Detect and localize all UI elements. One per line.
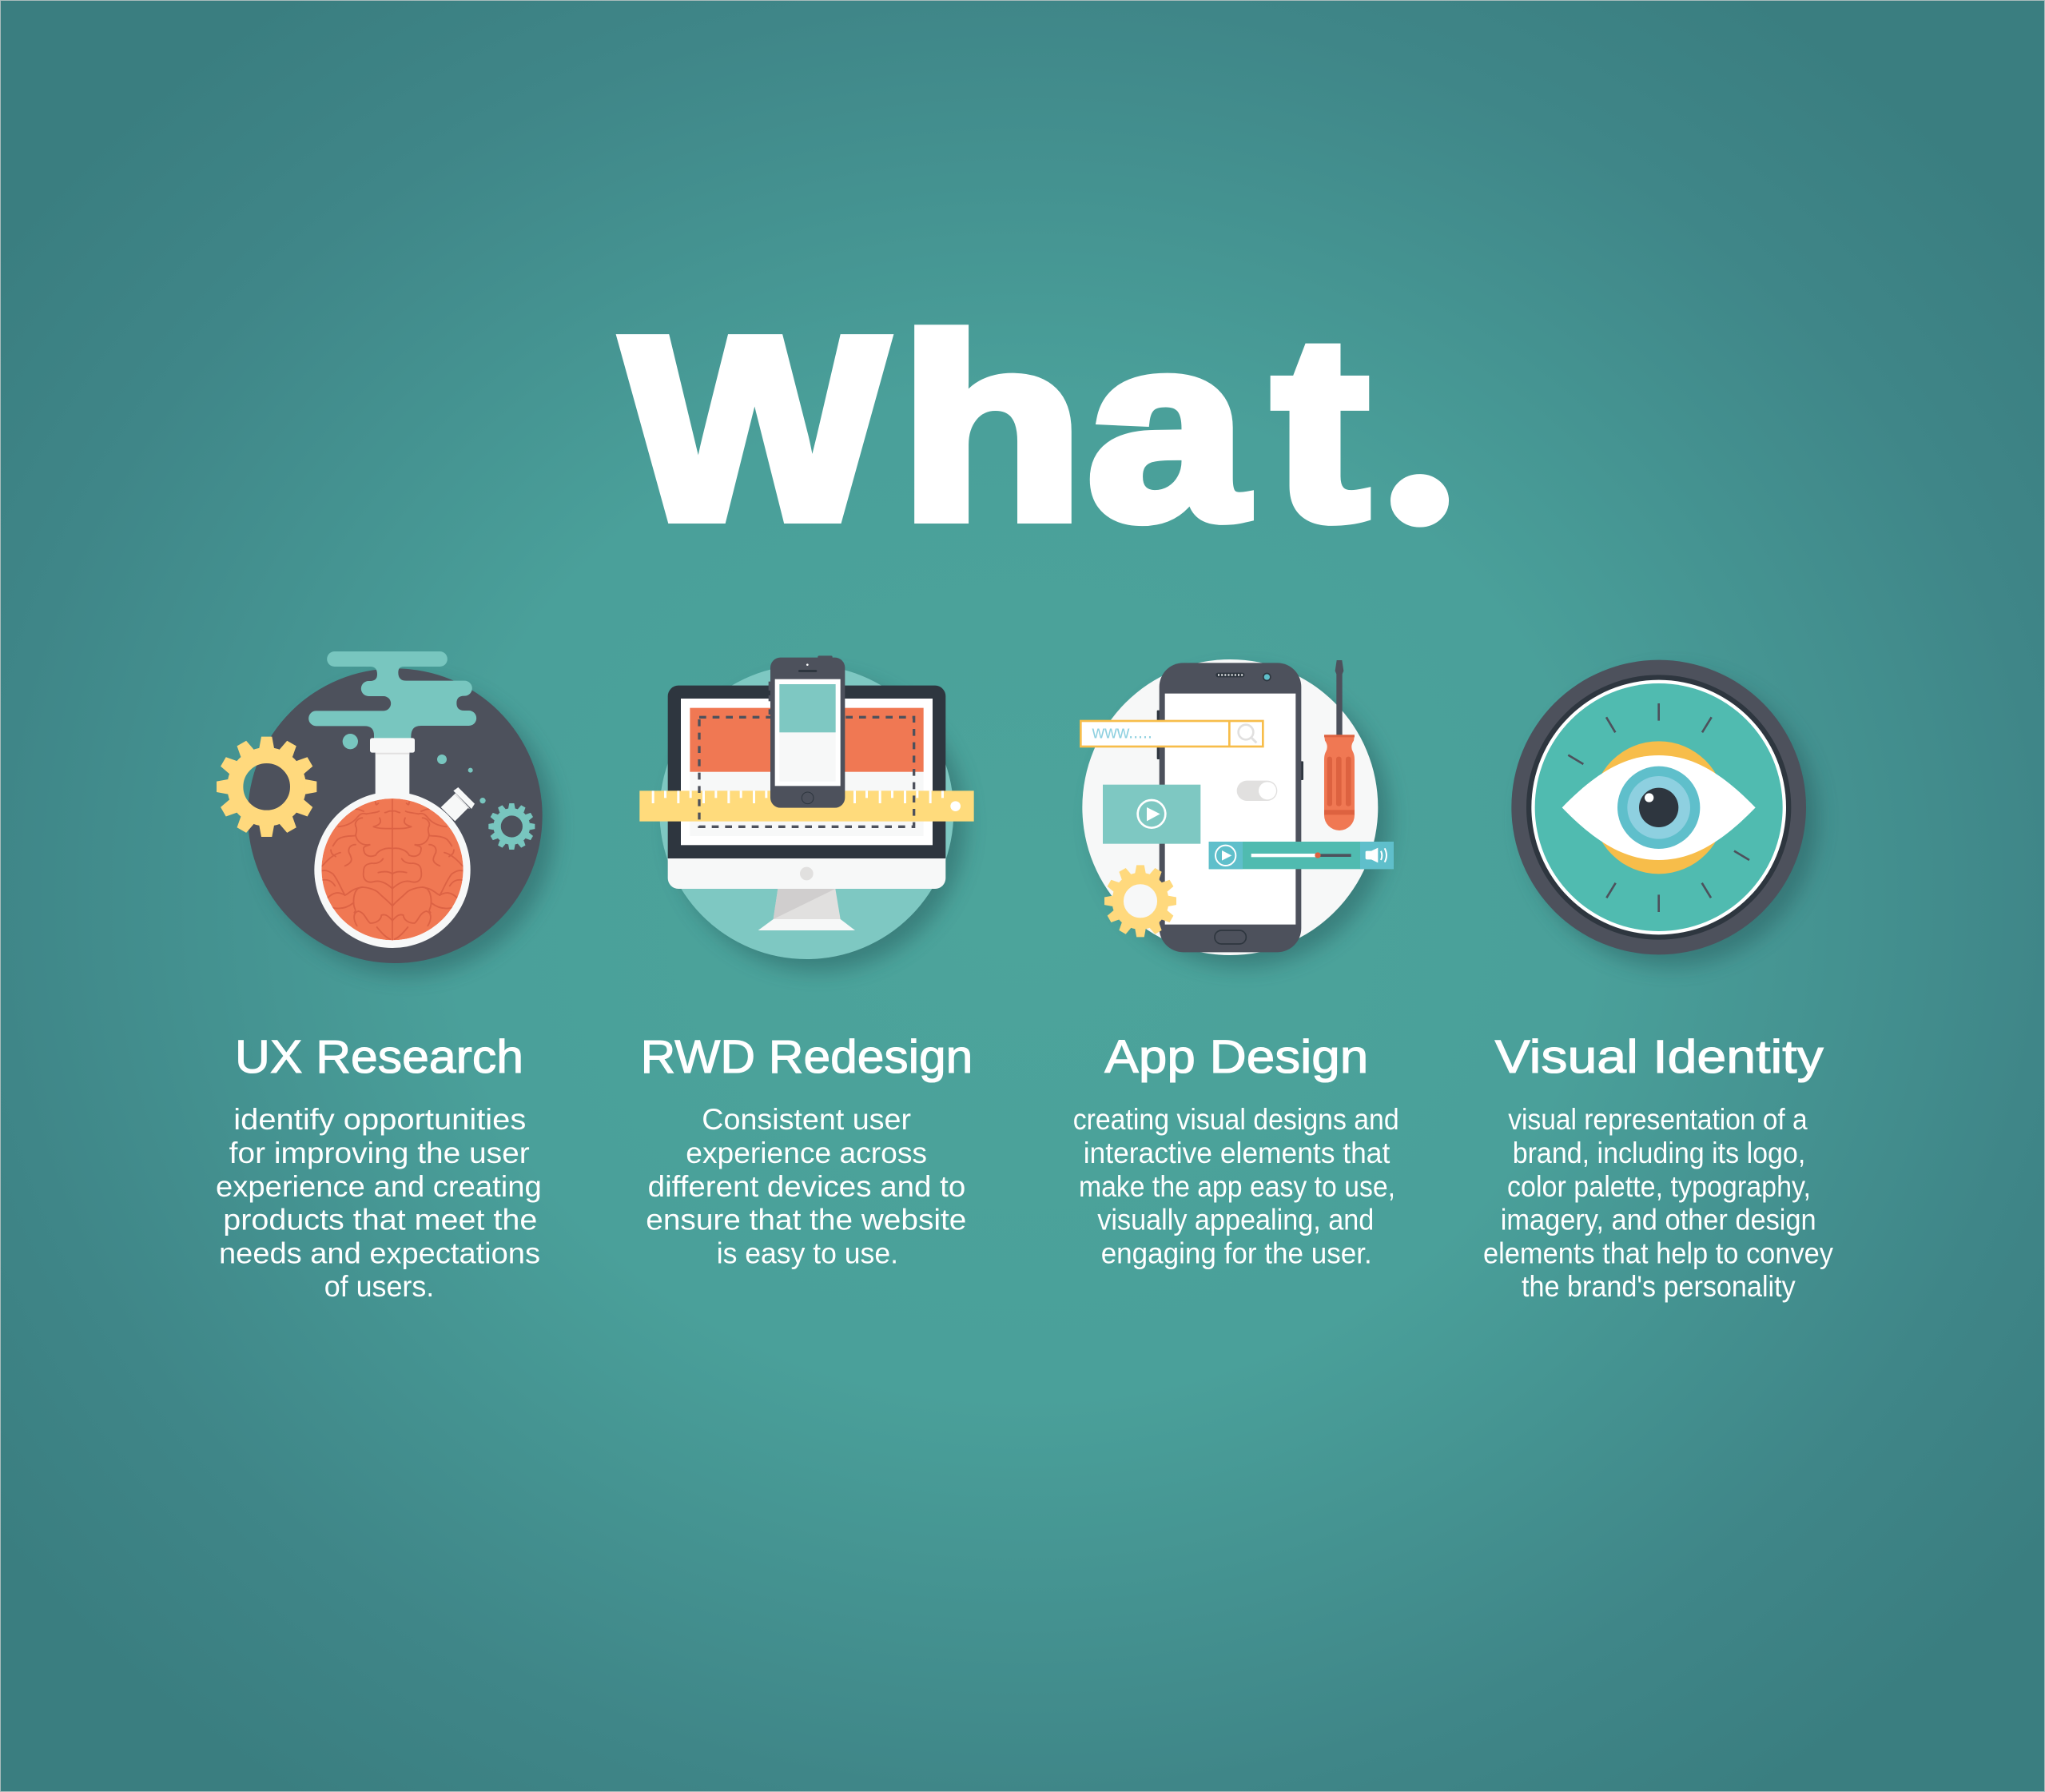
description: identify opportunities [233, 1103, 526, 1136]
column: UX Research [216, 1031, 542, 1303]
description: visually appealing, and [1097, 1204, 1374, 1236]
bubbles [343, 734, 486, 803]
description: interactive elements that [1084, 1137, 1391, 1169]
heading: UX Research [235, 1031, 523, 1083]
heading: Visual Identity [1495, 1031, 1824, 1083]
title: h [900, 284, 1084, 573]
description: experience across [686, 1137, 927, 1169]
description: brand, including its logo, [1513, 1137, 1805, 1169]
column: App Design [1073, 1031, 1399, 1269]
flask [314, 738, 475, 948]
description: elements that help to convey [1483, 1236, 1833, 1269]
icon: RWD monitor and phone [639, 655, 974, 971]
video tile [1103, 785, 1200, 844]
description: Consistent user [702, 1103, 911, 1136]
search bar: www..... [1092, 722, 1152, 742]
description: is easy to use. [717, 1236, 898, 1269]
smoke cloud [308, 651, 476, 741]
description: products that meet the [223, 1204, 537, 1236]
description: engaging for the user. [1101, 1236, 1372, 1269]
description: for improving the user [229, 1137, 530, 1169]
icon: visual identity eye [1511, 660, 1818, 966]
heading: RWD Redesign [641, 1031, 973, 1083]
eye [1562, 741, 1756, 874]
description: make the app easy to use, [1079, 1170, 1395, 1203]
phone [1157, 663, 1303, 952]
monitor [668, 686, 945, 930]
title: t [1273, 284, 1368, 573]
description [646, 1103, 966, 1269]
ruler [639, 790, 974, 822]
icon: UX research flask with brain [217, 651, 555, 975]
media player bar [1209, 842, 1394, 869]
description: imagery, and other design [1501, 1204, 1816, 1236]
icon: app design phone [1080, 659, 1394, 967]
description: visual representation of a [1508, 1103, 1808, 1136]
column: Visual Identity [1483, 1031, 1833, 1303]
description: the brand's personality [1522, 1270, 1796, 1303]
gear [1104, 865, 1176, 937]
gear: teal [488, 803, 535, 850]
column: RWD Redesign [641, 1031, 973, 1269]
title: a [1088, 284, 1247, 573]
dial ticks [1568, 703, 1749, 912]
description [1483, 1103, 1833, 1303]
dashed crop frame [699, 717, 914, 826]
heading: App Design [1104, 1031, 1368, 1083]
description: color palette, typography, [1507, 1170, 1811, 1203]
description: experience and creating [216, 1170, 542, 1203]
description: different devices and to [648, 1170, 965, 1203]
title: W [623, 284, 889, 573]
description [216, 1103, 542, 1303]
brain [321, 798, 464, 941]
description [1073, 1103, 1399, 1269]
phone [769, 655, 845, 808]
description: of users. [324, 1270, 434, 1303]
search bar [1080, 721, 1263, 747]
toggle [1237, 781, 1277, 801]
description: needs and expectations [219, 1236, 540, 1269]
gear: yellow [217, 737, 316, 837]
screwdriver [1324, 660, 1355, 830]
description: creating visual designs and [1073, 1103, 1399, 1136]
title: . [1384, 288, 1455, 575]
description: ensure that the website [646, 1204, 966, 1236]
